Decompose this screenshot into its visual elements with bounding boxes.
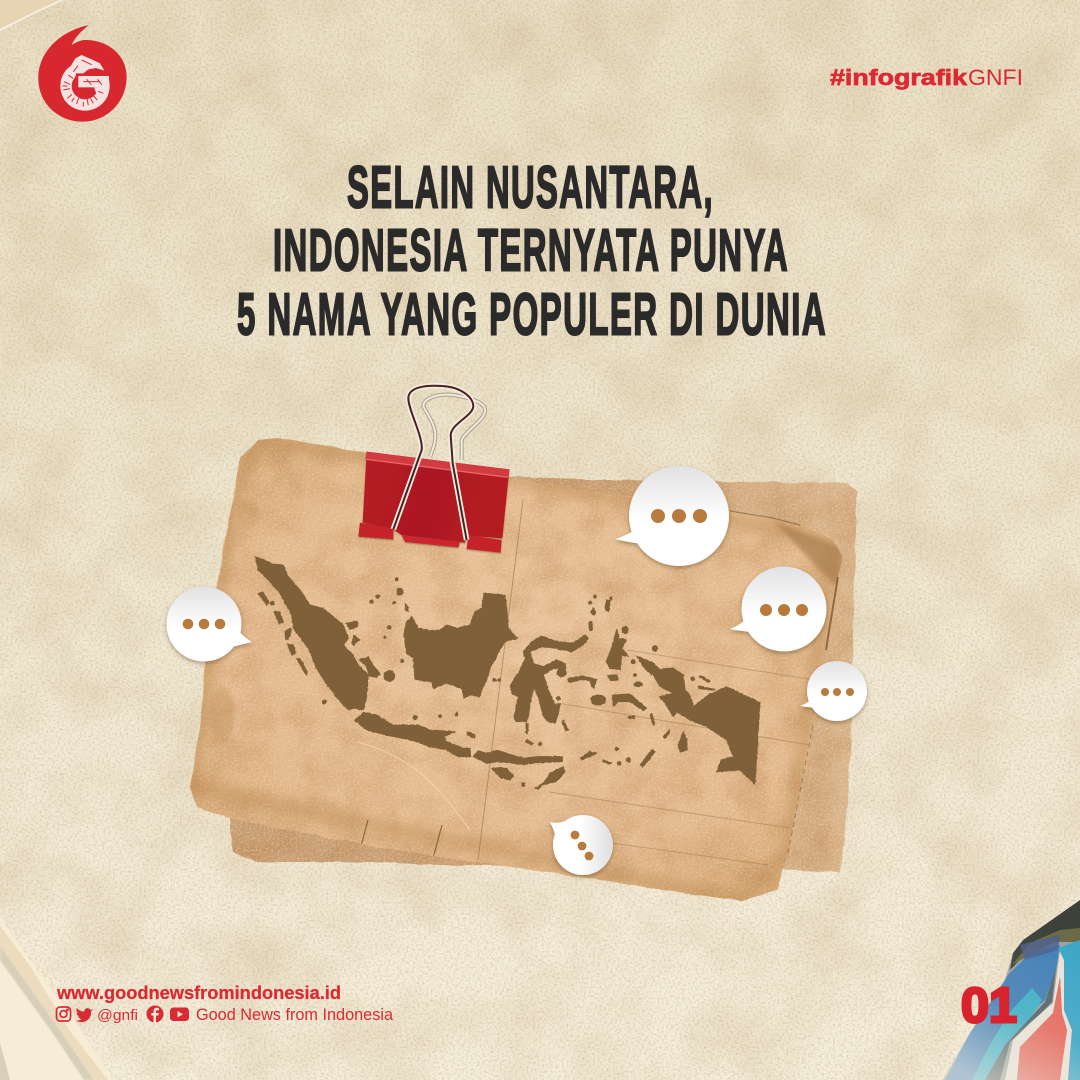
icon: facebook [146, 1006, 164, 1022]
chat bubble: right upper [730, 566, 826, 652]
page number: 01 [961, 979, 1017, 1033]
title: SELAIN NUSANTARA, [347, 154, 714, 220]
chat bubble: right small [800, 661, 867, 721]
map of Indonesia [255, 557, 760, 789]
clip rear wire [423, 395, 485, 460]
website: www.goodnewsfromindonesia.id [56, 982, 341, 1003]
binder clip [358, 386, 509, 553]
icon: youtube [170, 1008, 189, 1021]
clip front wire [393, 386, 473, 540]
chat bubble: bottom [550, 815, 613, 875]
torn paper corner, top left [0, 0, 62, 30]
hashtag: #infografikGNFI: #infografik [830, 65, 968, 90]
title [237, 154, 827, 348]
chat bubble: left [166, 586, 252, 662]
icon: instagram [56, 1007, 70, 1021]
footer: website and social handles [56, 982, 394, 1024]
eastern islands [500, 595, 760, 789]
painted artwork corner, bottom right [940, 895, 1080, 1080]
postcard aging and creases [190, 440, 843, 901]
logo: GNFI red six mark with eagle G [38, 25, 127, 122]
hashtag: #infografikGNFI: GNFI [968, 65, 1023, 90]
hashtag: #infografikGNFI [830, 65, 1023, 90]
postcards with map [190, 438, 857, 901]
clip body [358, 452, 509, 553]
chat bubble: top [615, 466, 729, 566]
icon: twitter [76, 1008, 93, 1022]
front postcard [190, 438, 843, 901]
postcard dark fold edge [730, 511, 838, 853]
back postcard [230, 476, 857, 872]
handle: @gnfi [97, 1007, 138, 1024]
torn paper layers, bottom left [0, 917, 113, 1080]
western islands [255, 557, 530, 786]
logo emblem: eagle head and G ring [60, 55, 113, 111]
channel name: Good News from Indonesia [196, 1005, 394, 1024]
